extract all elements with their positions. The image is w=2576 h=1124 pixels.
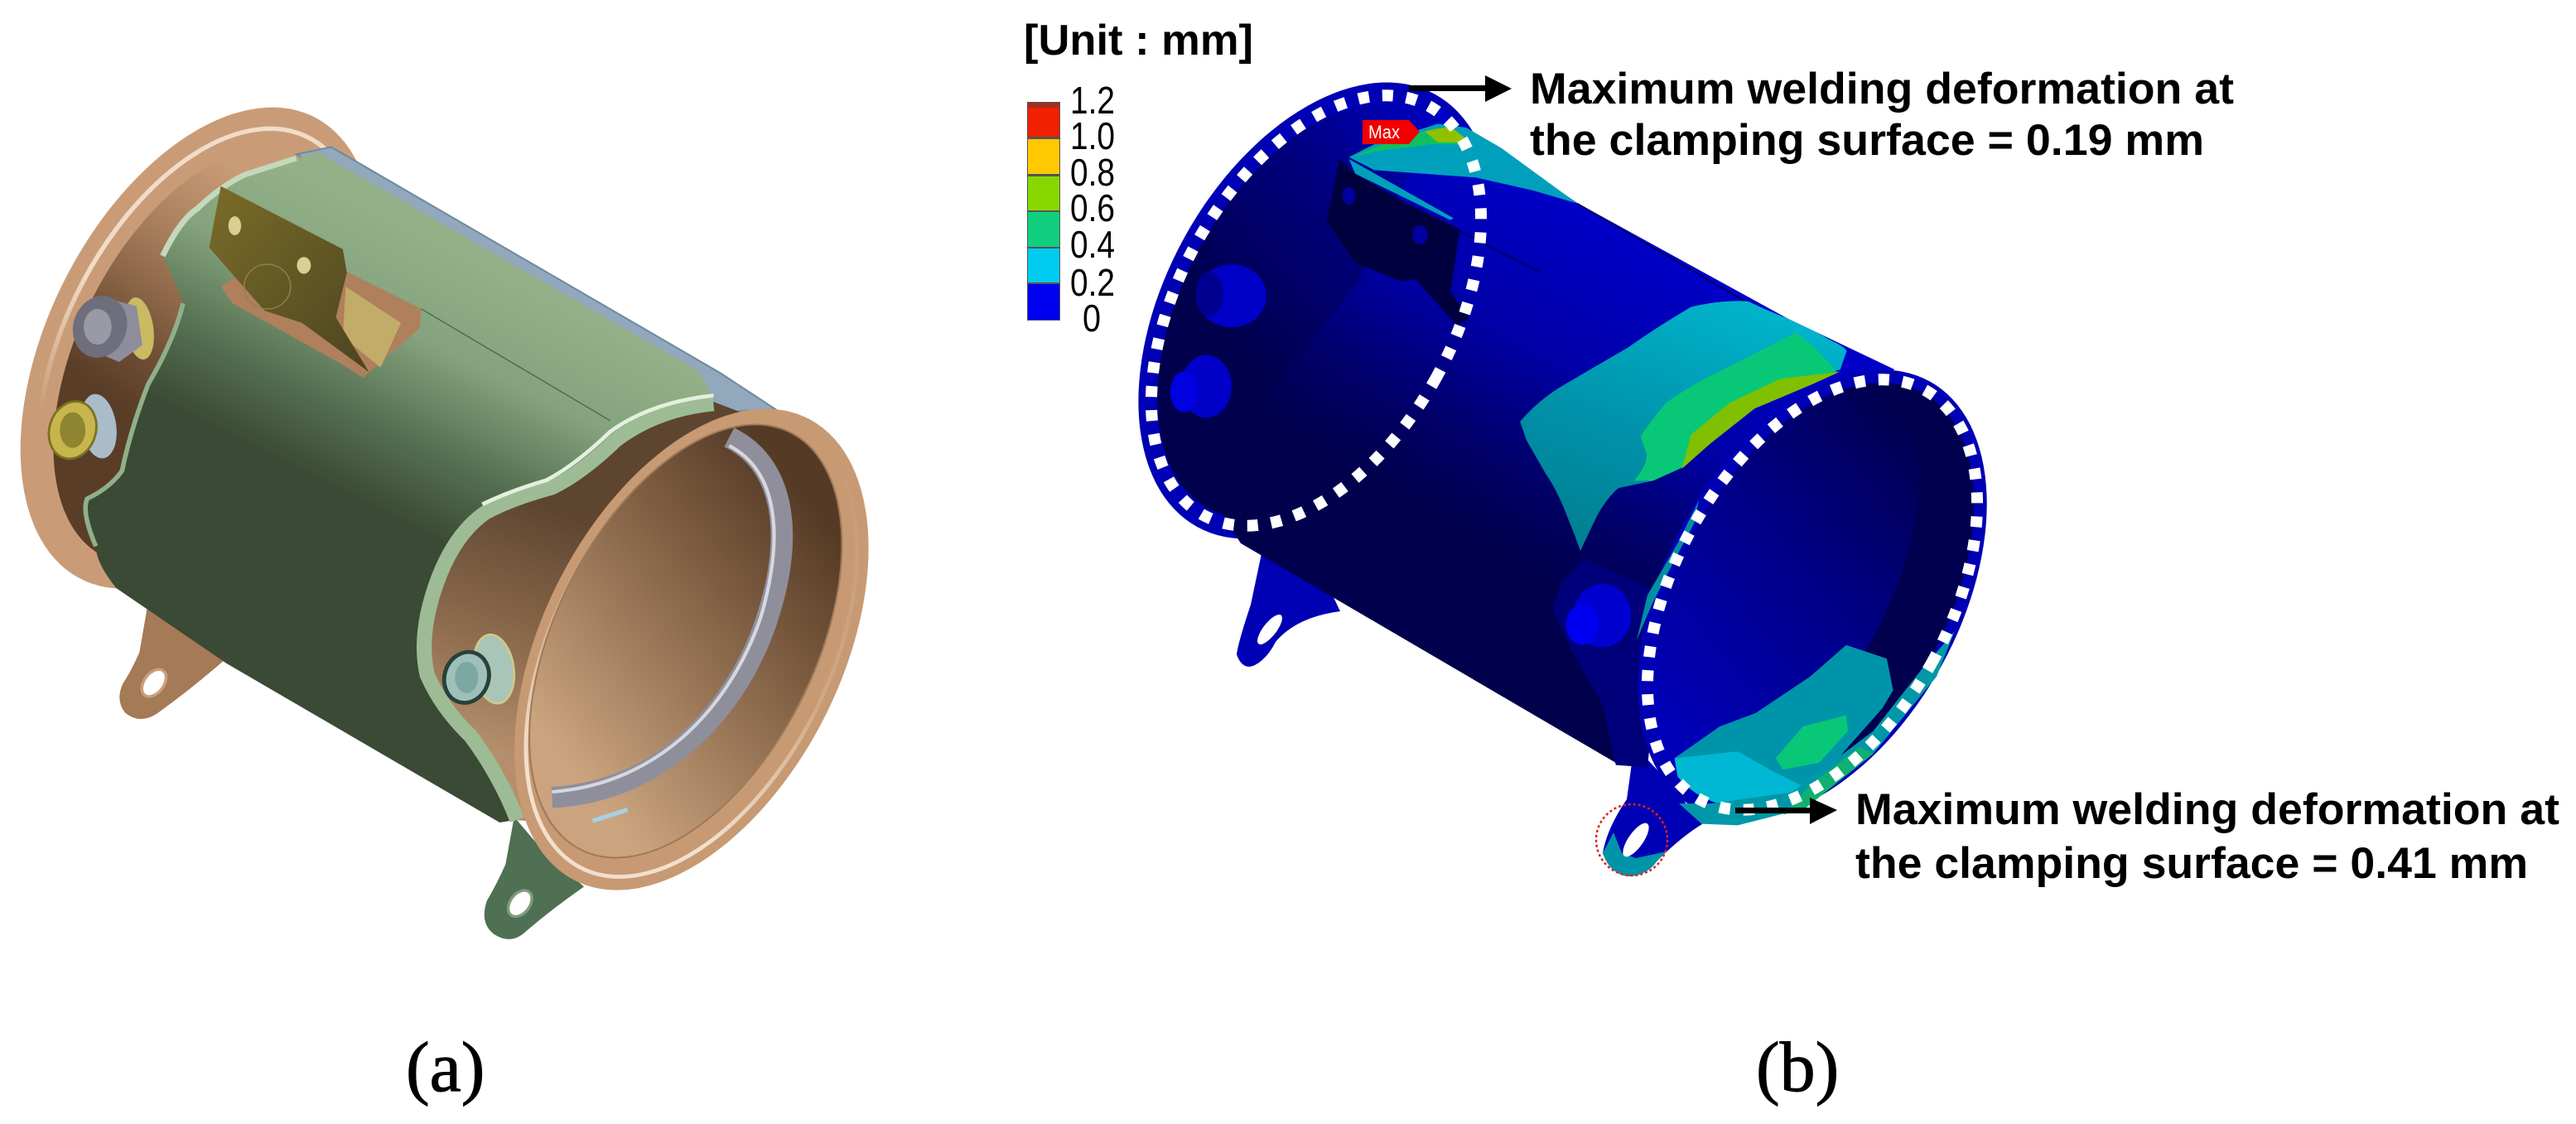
panel a: 3D CAD model: [0, 54, 941, 943]
rear bolts contour: [1170, 264, 1266, 417]
callout: rear clamping surface: Maximum welding deformation at: [1530, 65, 2234, 113]
front flange contour: [1565, 311, 2059, 879]
arrow to bottom callout: [1735, 798, 1837, 824]
legend values: 0: [1083, 297, 1101, 340]
front lug contour: [1603, 745, 1702, 876]
callout: rear clamping surface: [1530, 65, 2234, 165]
cylinder top seam strip: [297, 147, 776, 412]
max marker: [1363, 120, 1420, 144]
legend values: [1070, 79, 1115, 340]
legend values: 0.8: [1070, 151, 1115, 194]
legend values: 1.2: [1070, 79, 1115, 122]
inner barrel collar: [427, 395, 755, 825]
grey retaining ring: [552, 437, 782, 821]
callout: front clamping surface: [1855, 785, 2559, 888]
lower bolt: [42, 392, 121, 464]
panel b: deformation contour plot: [1138, 83, 1987, 876]
mid body contour patch: [1520, 301, 1846, 551]
top contour patch: [1327, 124, 1826, 369]
front flange and barrel interior: [442, 355, 941, 943]
legend values: 0.6: [1070, 186, 1115, 229]
upper bolt: [65, 290, 157, 364]
bracket cutout: [221, 270, 422, 378]
max marker: Max: [1368, 122, 1400, 142]
front bolt: [438, 632, 519, 707]
panel b caption: (b): [1756, 1027, 1839, 1107]
legend: colour scale: [1027, 79, 1115, 340]
rear flange: [0, 54, 447, 642]
rear dotted clamping ring: [1083, 40, 1549, 581]
unit label: [Unit : mm]: [1024, 17, 1253, 65]
cylinder body contour: [1201, 108, 1894, 765]
cylinder body: [85, 152, 713, 822]
rear flange contour: [1065, 22, 1567, 600]
rear mounting lug: [119, 602, 224, 719]
red dotted circle at lug: [1596, 804, 1667, 876]
panel a caption: (a): [406, 1027, 485, 1107]
arrow to top callout: [1409, 75, 1512, 102]
lower interior contour patch: [1675, 645, 1893, 813]
legend values: 0.4: [1070, 223, 1115, 266]
flange edge contour: [1637, 500, 1955, 825]
legend values: 1.0: [1070, 114, 1115, 157]
front bolt contour: [1566, 584, 1631, 647]
callout: rear clamping surface: the clamping surface = 0.19 mm: [1530, 116, 2204, 165]
legend values: 0.2: [1070, 261, 1115, 304]
callout: front clamping surface: the clamping surface = 0.41 mm: [1855, 839, 2528, 888]
barrel collar contour: [1552, 559, 1666, 767]
barrel interior contour: [1652, 383, 1975, 803]
front dotted clamping ring: [1580, 324, 2045, 866]
front mounting lug: [485, 817, 584, 939]
callout: front clamping surface: Maximum welding deformation at: [1855, 785, 2559, 834]
bracket: [210, 186, 401, 372]
rear lug contour: [1237, 530, 1340, 667]
legend colour bar: [1027, 102, 1060, 321]
upper edge of body: [1437, 106, 1894, 373]
